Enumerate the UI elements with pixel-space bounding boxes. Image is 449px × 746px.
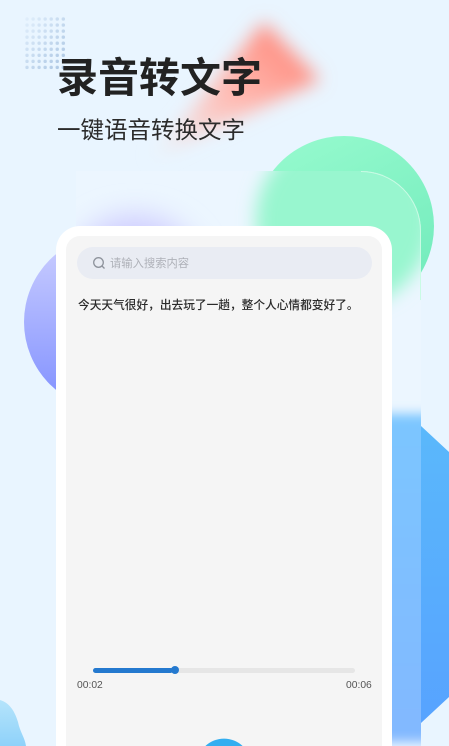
subtitle: 一键语音转换文字 [57,117,245,143]
icon: search [93,257,105,269]
purple circle [24,234,200,410]
transcribed text: 今天天气很好，出去玩了一趟，整个人心情都变好了。 [78,299,359,312]
frosted glass panel [84,171,421,746]
right blue shape [421,426,449,723]
progress bar [93,666,355,674]
green circle [254,136,434,316]
dot grid decoration [24,16,66,71]
search placeholder: 请输入搜索内容 [110,258,189,270]
red blurred triangle [152,22,320,158]
total time: 00:06 [346,680,372,691]
progress track [93,668,355,672]
progress fill [93,668,173,672]
bottom-left blue blob [0,700,26,746]
title: 录音转文字 [57,55,262,101]
search bar [77,247,372,279]
phone card [56,226,392,746]
progress knob [171,666,179,674]
elapsed time: 00:02 [77,680,103,691]
record button [206,738,242,746]
